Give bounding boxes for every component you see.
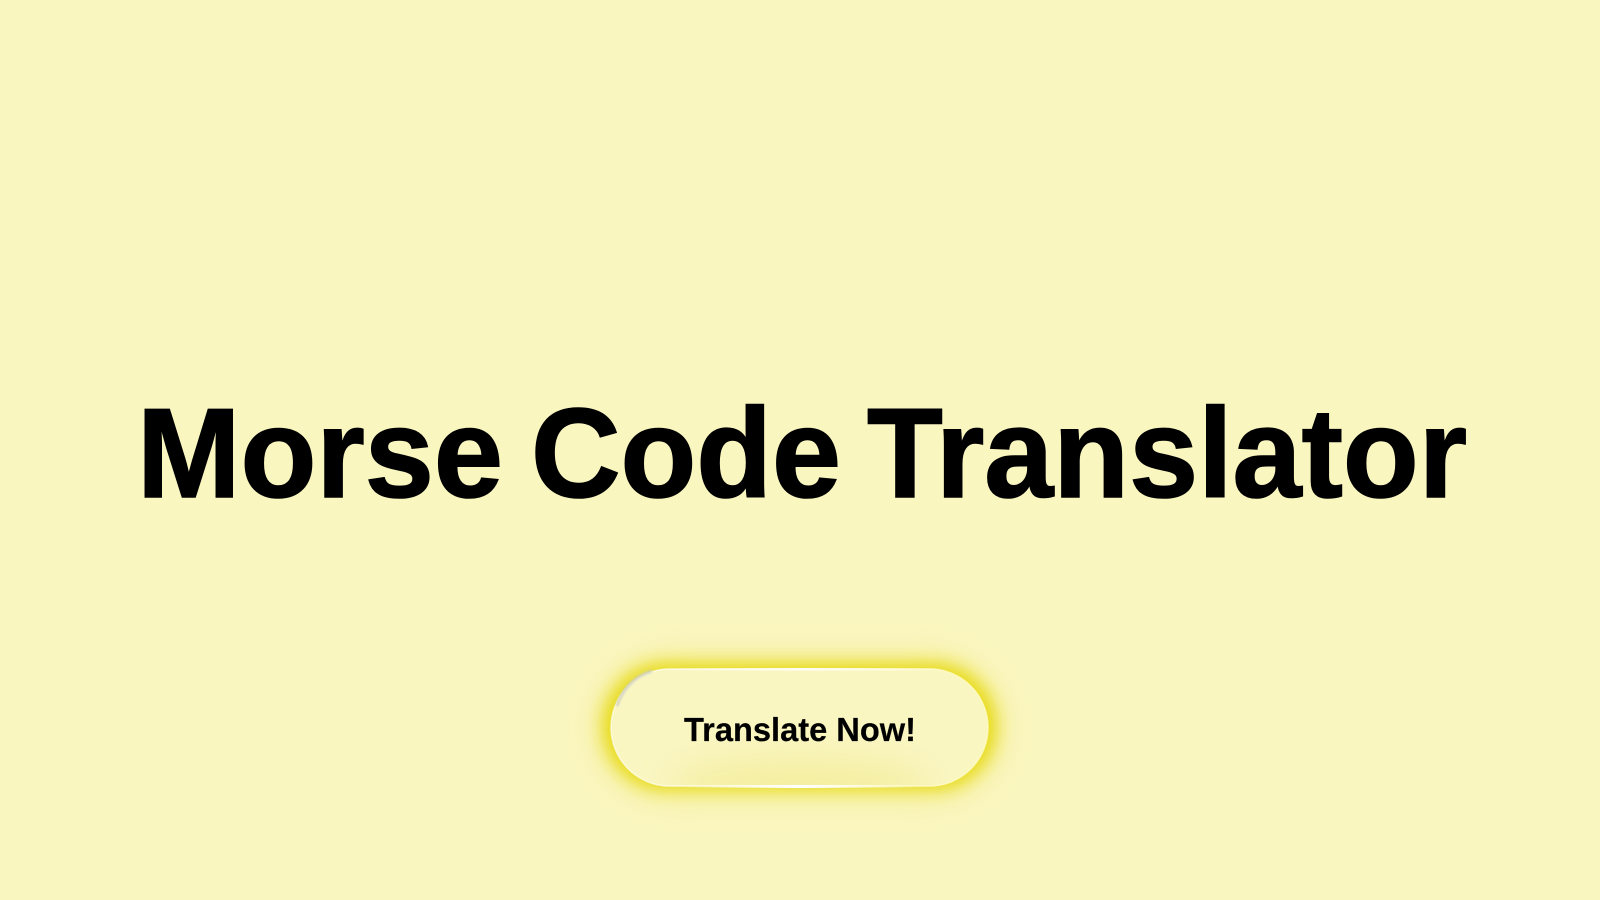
title word: Translator: Translator <box>867 382 1467 524</box>
button bottom highlight <box>680 785 920 788</box>
button: Translate Now! <box>596 656 1003 811</box>
button body <box>610 668 989 787</box>
button left sheen <box>617 671 652 706</box>
title <box>137 382 1467 524</box>
title word: Code: Code <box>531 382 841 524</box>
button glow <box>596 656 1003 799</box>
button label: Translate Now! <box>684 711 916 748</box>
button top highlight <box>660 668 950 670</box>
title word: Morse: Morse <box>137 382 503 524</box>
